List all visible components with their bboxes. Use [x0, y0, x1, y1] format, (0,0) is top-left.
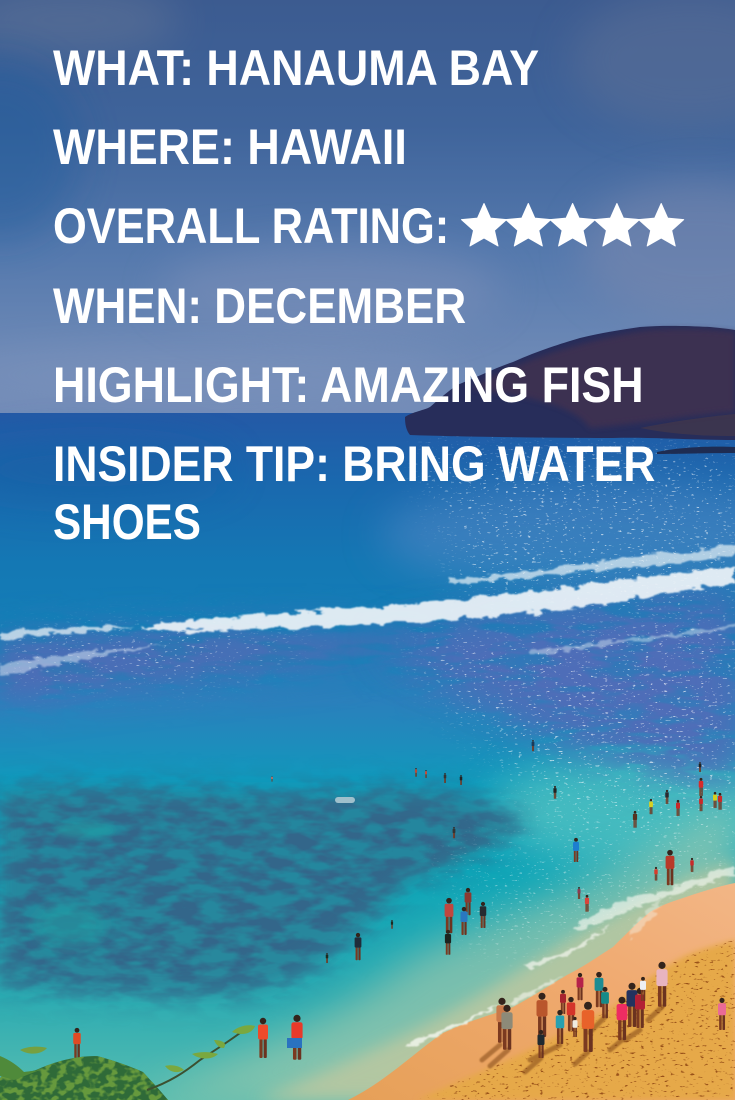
- shallow water near shore: [140, 800, 735, 1100]
- icon: five star rating: [461, 203, 684, 246]
- text: when: WHEN: DECEMBER: [53, 278, 466, 334]
- text: insider tip: INSIDER TIP: BRING WATER: [53, 436, 655, 492]
- text: highlight: HIGHLIGHT: AMAZING FISH: [53, 357, 644, 413]
- text: where: WHERE: HAWAII: [53, 119, 407, 175]
- foliage in foreground: [0, 1025, 255, 1100]
- sea: [0, 413, 735, 1100]
- breaking waves: [0, 544, 735, 676]
- people in shallow water: [73, 740, 722, 1060]
- sky: [0, 0, 735, 420]
- people on the beach: [496, 962, 726, 1058]
- water glitter: [0, 450, 735, 960]
- text: what: WHAT: HANAUMA BAY: [53, 40, 539, 96]
- headland: [405, 326, 735, 454]
- foam along shore: [406, 866, 735, 1048]
- coral reef: [0, 788, 525, 994]
- text: insider tip: SHOES: [53, 494, 201, 550]
- lavender reef patch: [0, 600, 735, 780]
- beach: [348, 883, 735, 1100]
- text: overall rating: OVERALL RATING:: [53, 198, 449, 254]
- text: insider tip: [53, 436, 655, 550]
- beachgoers: [73, 740, 726, 1072]
